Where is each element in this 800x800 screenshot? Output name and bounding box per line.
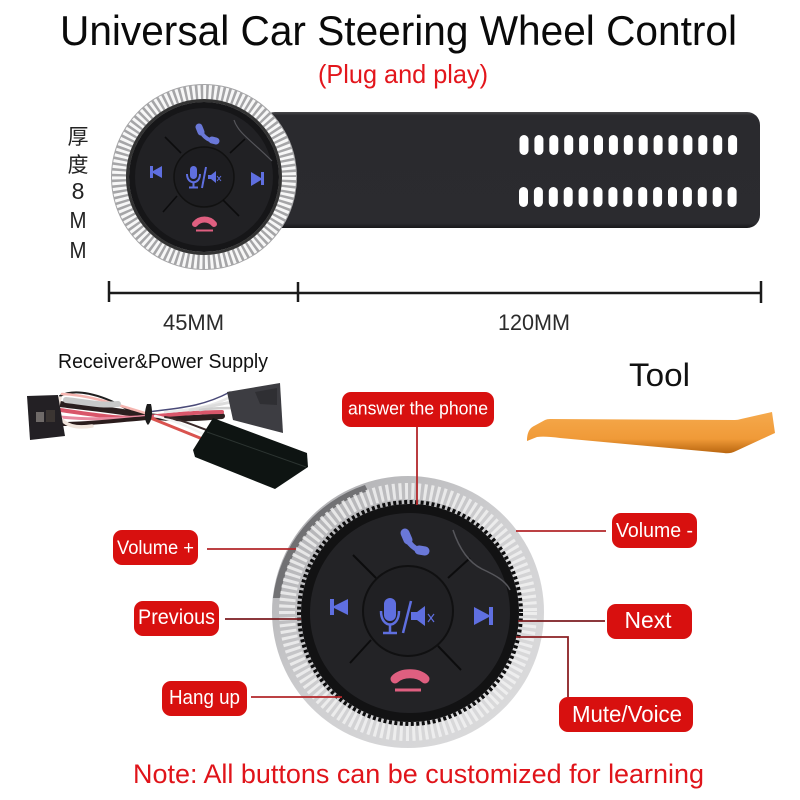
icon: hang up (195, 220, 214, 230)
icon: mic and mute (381, 598, 434, 633)
pry tool (527, 412, 775, 453)
label: hang up: Hang up (169, 687, 240, 709)
thickness label: M (70, 237, 86, 263)
label: volume minus (612, 513, 697, 548)
thickness label: 8 (72, 178, 84, 204)
dimension label 45MM: 45MM (163, 310, 224, 335)
label: previous (134, 601, 219, 636)
footnote: Note: All buttons can be customized for learning (133, 759, 704, 789)
callout lines (207, 427, 606, 697)
dimension label 120MM: 120MM (498, 310, 570, 335)
label: mute or voice: Mute/Voice (572, 701, 682, 727)
icon: answer phone (405, 533, 425, 551)
label: answer the phone (342, 392, 494, 427)
small control puck (111, 84, 297, 270)
large control puck (272, 476, 544, 748)
label: volume plus: Volume + (117, 538, 194, 559)
label: next (607, 604, 692, 639)
icon: mic and mute (187, 166, 221, 188)
subtitle: (Plug and play) (318, 59, 488, 89)
icon: hang up (395, 674, 425, 690)
thickness label: M (70, 207, 86, 233)
label: volume plus (113, 530, 198, 565)
dimension line (109, 281, 761, 303)
receiver heading: Receiver&Power Supply (58, 351, 268, 373)
icon: previous (330, 599, 348, 615)
icon: next (474, 607, 493, 625)
label: mute or voice (559, 697, 693, 732)
icon: answer phone (199, 127, 216, 141)
icon: previous (150, 166, 162, 178)
thickness label (68, 126, 88, 263)
thickness label: 厚 (68, 126, 88, 149)
thickness label: 度 (68, 154, 88, 177)
tool heading: Tool (629, 357, 690, 393)
label: previous: Previous (138, 606, 215, 629)
title: Universal Car Steering Wheel Control (60, 7, 737, 54)
label: hang up (162, 681, 247, 716)
icon: next (251, 172, 264, 186)
label: volume minus: Volume - (616, 520, 693, 542)
mounting strap (262, 112, 760, 228)
label: answer the phone: answer the phone (348, 398, 488, 418)
receiver and power harness (27, 383, 308, 489)
label: next: Next (624, 607, 672, 633)
